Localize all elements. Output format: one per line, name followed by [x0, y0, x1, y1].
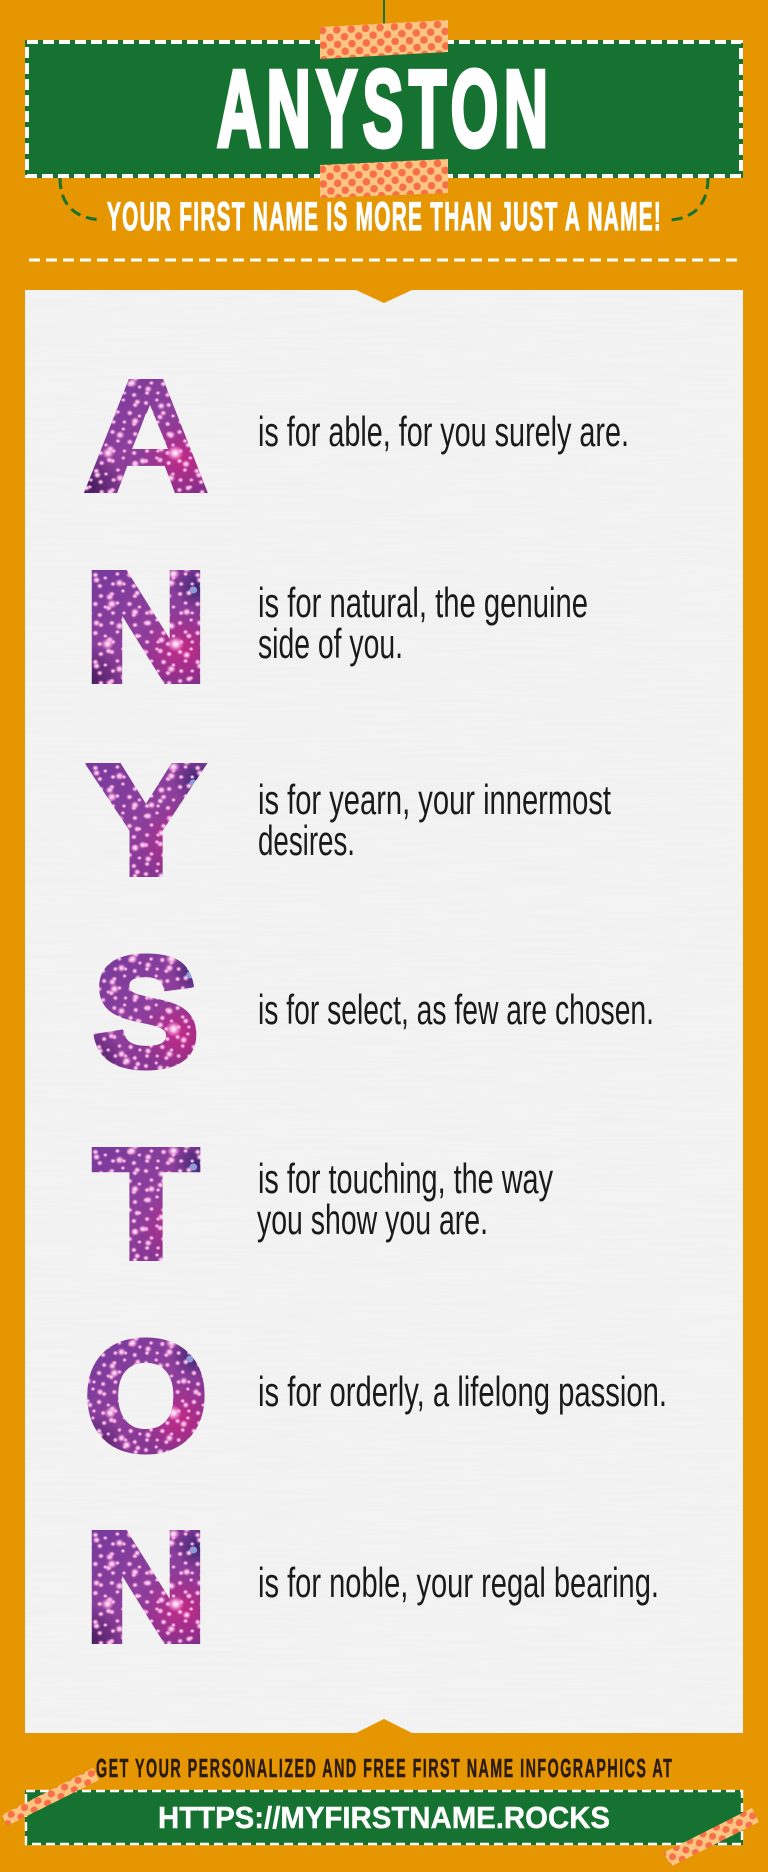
hanging line: [383, 0, 385, 25]
letter N: N: [85, 1501, 207, 1673]
text T: you show you are.: [257, 1196, 488, 1243]
tape: banner top: [320, 20, 448, 59]
text T: [257, 1155, 553, 1243]
text T: is for touching, the way: [258, 1155, 553, 1202]
letter T: T: [94, 1118, 198, 1290]
row: S: [94, 925, 654, 1098]
letter A counter: [132, 405, 168, 449]
letter A: A: [86, 350, 206, 522]
text Y: desires.: [258, 817, 355, 864]
letter S: S: [94, 925, 198, 1098]
row: A: [86, 350, 629, 522]
letter O: O: [85, 1309, 207, 1482]
footer prompt: GET YOUR PERSONALIZED AND FREE FIRST NAME INFOGRAPHICS AT: [96, 1755, 672, 1783]
text Y: [258, 776, 611, 864]
text N: is for natural, the genuine: [258, 579, 588, 626]
text N: [258, 579, 588, 667]
connector: left dashed curve: [60, 178, 103, 220]
row: T: [94, 1118, 553, 1290]
panel: letters: [25, 290, 743, 1733]
title banner: [25, 40, 743, 178]
letter N: N: [85, 541, 207, 713]
subtitle: YOUR FIRST NAME IS MORE THAN JUST A NAME!: [107, 194, 661, 239]
row: O: [85, 1309, 667, 1482]
row: N: [85, 541, 588, 713]
text Y: is for yearn, your innermost: [258, 776, 611, 823]
tape: banner bottom: [320, 159, 448, 198]
letter Y: Y: [90, 734, 202, 906]
row: N2: [85, 1501, 659, 1673]
text N: side of you.: [258, 620, 403, 667]
footer url: HTTPS://MYFIRSTNAME.ROCKS: [158, 1801, 610, 1835]
row: Y: [90, 734, 611, 906]
tape: footer left: [2, 1768, 99, 1826]
footer banner: [25, 1790, 743, 1845]
title text: ANYSTON: [217, 47, 548, 169]
connector: right dashed curve: [669, 178, 708, 220]
tape: footer right: [663, 1808, 759, 1866]
